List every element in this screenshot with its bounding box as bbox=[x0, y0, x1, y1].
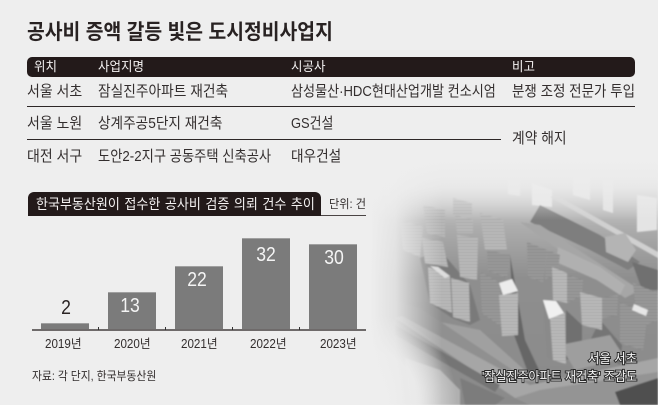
bottom road bbox=[515, 372, 658, 405]
value 22: 22 bbox=[187, 269, 207, 291]
dark courtyards bbox=[510, 255, 540, 378]
value 32: 32 bbox=[256, 244, 276, 266]
table bbox=[27, 57, 635, 165]
towers bbox=[400, 220, 423, 257]
row: Jamsil: 분쟁 조정 전문가 투입 bbox=[512, 83, 635, 100]
label 2021: 2021년 bbox=[181, 337, 218, 351]
row: Sanggye: GS건설 bbox=[291, 115, 333, 132]
row: Jamsil: 잠실진주아파트 재건축 bbox=[98, 83, 228, 100]
header: note: 비고 bbox=[512, 59, 535, 74]
photo caption: 서울 서초 bbox=[588, 351, 637, 366]
row: Doan bbox=[27, 148, 341, 165]
chart heading bbox=[28, 192, 321, 216]
row: Doan: 도안2-2지구 공동주택 신축공사 bbox=[98, 148, 271, 165]
upper distant blocks bbox=[532, 183, 552, 207]
row: Doan: 대전 서구 bbox=[27, 148, 82, 165]
row: Jamsil: 삼성물산·HDC현대산업개발 컨소시엄 bbox=[291, 83, 496, 100]
landscaped strip bbox=[430, 320, 540, 382]
value 13: 13 bbox=[120, 295, 140, 317]
low-rise block bottom left bbox=[405, 358, 460, 405]
photo caption: '잠실진주아파트 재건축' 조감도 bbox=[482, 369, 637, 384]
value 30: 30 bbox=[324, 247, 344, 269]
row: Jamsil bbox=[27, 83, 635, 100]
note: contract termination: 계약 해지 bbox=[512, 130, 567, 147]
tree band bbox=[530, 205, 640, 270]
label 2023: 2023년 bbox=[320, 337, 357, 351]
bar 2021 bbox=[175, 266, 223, 329]
bar chart bbox=[32, 238, 366, 351]
header: contractor: 시공사 bbox=[291, 59, 325, 74]
table header row bbox=[27, 57, 635, 77]
row: Sanggye: 서울 노원 bbox=[27, 115, 82, 132]
chart heading: 한국부동산원이 접수한 공사비 검증 의뢰 건수 추이 bbox=[36, 196, 315, 212]
value 2: 2 bbox=[61, 297, 71, 319]
white roofs bbox=[499, 279, 518, 295]
bar 2022 bbox=[242, 238, 290, 329]
photo caption bbox=[482, 351, 638, 384]
header: location: 위치 bbox=[34, 59, 57, 74]
axis bbox=[32, 329, 366, 330]
label 2020: 2020년 bbox=[114, 337, 151, 351]
row: Sanggye bbox=[27, 115, 333, 132]
row: Doan: 대우건설 bbox=[291, 148, 341, 165]
header: project: 사업지명 bbox=[98, 59, 144, 74]
row: Sanggye: 상계주공5단지 재건축 bbox=[98, 115, 222, 132]
unit label: 단위: 건 bbox=[329, 197, 366, 211]
label 2019: 2019년 bbox=[45, 337, 82, 351]
title: 공사비 증액 갈등 빛은 도시정비사업지 bbox=[27, 21, 333, 44]
bar 2020 bbox=[108, 292, 156, 329]
row: Jamsil: 서울 서초 bbox=[27, 83, 82, 100]
source: 자료: 각 단지, 한국부동산원 bbox=[32, 369, 156, 383]
bar 2023 bbox=[309, 244, 357, 329]
label 2022: 2022년 bbox=[250, 337, 287, 351]
bar 2019 bbox=[41, 323, 89, 329]
